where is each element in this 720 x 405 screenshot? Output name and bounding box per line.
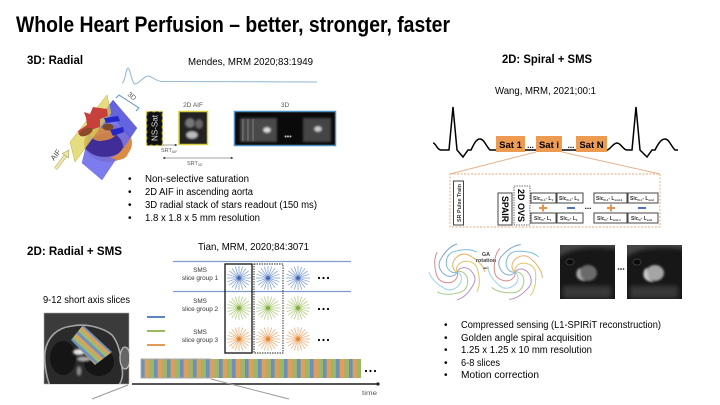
saturation blocks [496,136,607,152]
slice blocks: Slc [597,216,605,222]
slice blocks: 1 [550,218,552,222]
slice blocks: D [568,218,571,222]
SR pulse train: SR Pulse Train [457,183,463,222]
saturation blocks: Sat N [579,140,604,151]
slice blocks: - L [571,196,577,202]
slice blocks: end-1 [613,218,621,222]
bullet list: 3D radial: • [128,187,132,198]
group labels: slice group 1 [182,275,219,282]
SRT timing arrows [161,144,233,167]
group labels: SMS [193,298,207,305]
3D image series [234,102,336,146]
heading: 3D Radial: 3D: Radial [27,53,83,67]
slices label: 9-12 short axis slices [43,294,130,306]
GA rotation label: GA [482,252,490,258]
SR pulse train [454,181,464,225]
slice blocks: - L [607,216,613,222]
strip continuation dots [365,370,376,372]
chest MRI with slices overlay [44,313,130,386]
bullet list: 2D spiral: Golden angle spiral acquisition [461,333,592,344]
slice blocks: D [542,218,545,222]
SRT timing arrows: SRT [161,148,172,154]
slice blocks: Slc [534,216,542,222]
bullet list: 2D spiral: 6-8 slices [461,358,500,369]
slice blocks: Slc [559,196,567,202]
bullet list: 3D radial: • [128,174,132,185]
SRT timing arrows: SRT [187,161,198,167]
group labels: slice group 3 [182,337,219,344]
slice blocks: - L [570,216,576,222]
3D bracket: 3D [126,91,137,102]
spiral trajectory left [424,239,490,305]
slice blocks: Slc [631,216,639,222]
slice blocks: end-1 [614,198,623,202]
sequence table rules [173,262,351,292]
NS-Sat block: NS-Sat [150,114,160,141]
slice blocks: 1 [551,198,553,202]
3D bracket [116,91,139,111]
2D AIF image [179,102,208,144]
GA rotation label: rotation [476,258,497,264]
heading: 2D Radial + SMS: 2D: Radial + SMS [27,244,122,258]
bullet list: 2D spiral: 1.25 x 1.25 x 10 mm resolution [461,345,592,356]
SPAIR [498,193,512,225]
bullet list: 2D spiral [444,320,661,381]
saturation blocks: Sat 1 [499,140,523,151]
signal curve [122,68,317,84]
slice blocks: Slc [630,196,638,202]
bullet list: 3D radial: 3D radial stack of stars readout (150 ms) [145,200,317,211]
plus and minus signs [539,202,646,212]
pulse sequence detail [450,174,660,227]
NS-Sat block [146,112,162,146]
GA rotation label: ••• [483,266,489,272]
slice blocks [531,193,658,223]
group labels: SMS [193,267,207,274]
ECG trace [433,107,678,157]
bullet list: 3D radial: Non-selective saturation [145,174,249,185]
slice blocks: - L [544,216,550,222]
bullet list: 3D radial: 2D AIF in ascending aorta [145,187,253,198]
bullet list: 2D spiral: • [444,358,448,369]
time axis: time [362,390,377,397]
bullet list: 2D spiral: • [444,333,448,344]
bullet list: 3D radial: • [128,213,132,224]
cardiac MRI frame 1 [560,245,615,299]
spiral trajectory right [476,233,554,311]
saturation blocks: ... [527,141,534,150]
citation: Mendes: Mendes, MRM 2020;83:1949 [188,56,313,68]
SPAIR: SPAIR [500,196,510,222]
plus and minus signs: ... [585,202,591,211]
panel: 3D radial [27,53,336,224]
bullet list: 2D spiral: Compressed sensing (L1-SPIRiT reconstruction) [461,320,661,331]
heart and slab illustration [70,95,137,180]
slice blocks: D [639,218,642,222]
bullet list: 2D spiral: • [444,370,448,381]
slice blocks: D-1 [638,198,643,202]
bullet list: 3D radial: • [128,200,132,211]
group labels: slice group 2 [182,306,219,313]
radial star grid [227,266,310,351]
bullet list: 2D spiral: • [444,320,448,331]
citation: Wang: Wang, MRM, 2021;00:1 [495,85,596,97]
slice blocks: D-1 [541,198,546,202]
continuation dots [318,277,329,341]
slice blocks: D [605,218,608,222]
slice blocks: - L [545,196,551,202]
AIF arrow [48,147,69,169]
acquisition strip [141,359,361,378]
frame ellipsis [618,268,624,270]
slice blocks: - L [642,196,648,202]
3D image series: ••• [284,134,292,141]
bullet list: 2D spiral: • [444,345,448,356]
SRT timing arrows: AIF [172,150,177,154]
bullet list: 2D spiral: Motion correction [461,370,539,381]
slice blocks: - L [608,196,614,202]
panel: 2D spiral SMS [424,52,685,381]
2D OVS [514,186,530,225]
slice blocks: - L [641,216,647,222]
saturation blocks: ... [568,141,574,150]
saturation blocks: Sat i [539,140,559,151]
time axis [132,382,380,397]
2D AIF image: 2D AIF [183,102,203,109]
slice blocks: D-1 [567,198,572,202]
GA rotation label [476,252,497,272]
title: Whole Heart Perfusion – better, stronger, faster [16,12,450,37]
slice blocks: 2 [576,218,578,222]
colour legend [147,317,165,345]
expansion lines [450,152,660,174]
selection frames [225,264,283,353]
slice blocks: Slc [596,196,604,202]
group labels [182,267,219,344]
3D image series: 3D [281,102,289,109]
SRT timing arrows: 3D [198,163,203,167]
slice blocks: Slc [533,196,541,202]
slice blocks: D-1 [604,198,609,202]
zoom lines [92,379,289,399]
bullet list: 3D radial [128,174,317,224]
heading: 2D Spiral + SMS: 2D: Spiral + SMS [502,52,592,66]
panel: 2D radial SMS [27,241,380,399]
AIF arrow: AIF [48,147,63,162]
cardiac MRI frame 2 [627,245,682,299]
citation: Tian: Tian, MRM, 2020;84:3071 [198,241,309,253]
slice blocks: 2 [577,198,579,202]
slice blocks: end [647,218,652,222]
bullet list: 3D radial: 1.8 x 1.8 x 5 mm resolution [145,213,260,224]
2D OVS: 2D OVS [516,189,526,222]
group labels: SMS [193,329,207,336]
slice blocks: Slc [560,216,568,222]
slice blocks: end [648,198,654,202]
